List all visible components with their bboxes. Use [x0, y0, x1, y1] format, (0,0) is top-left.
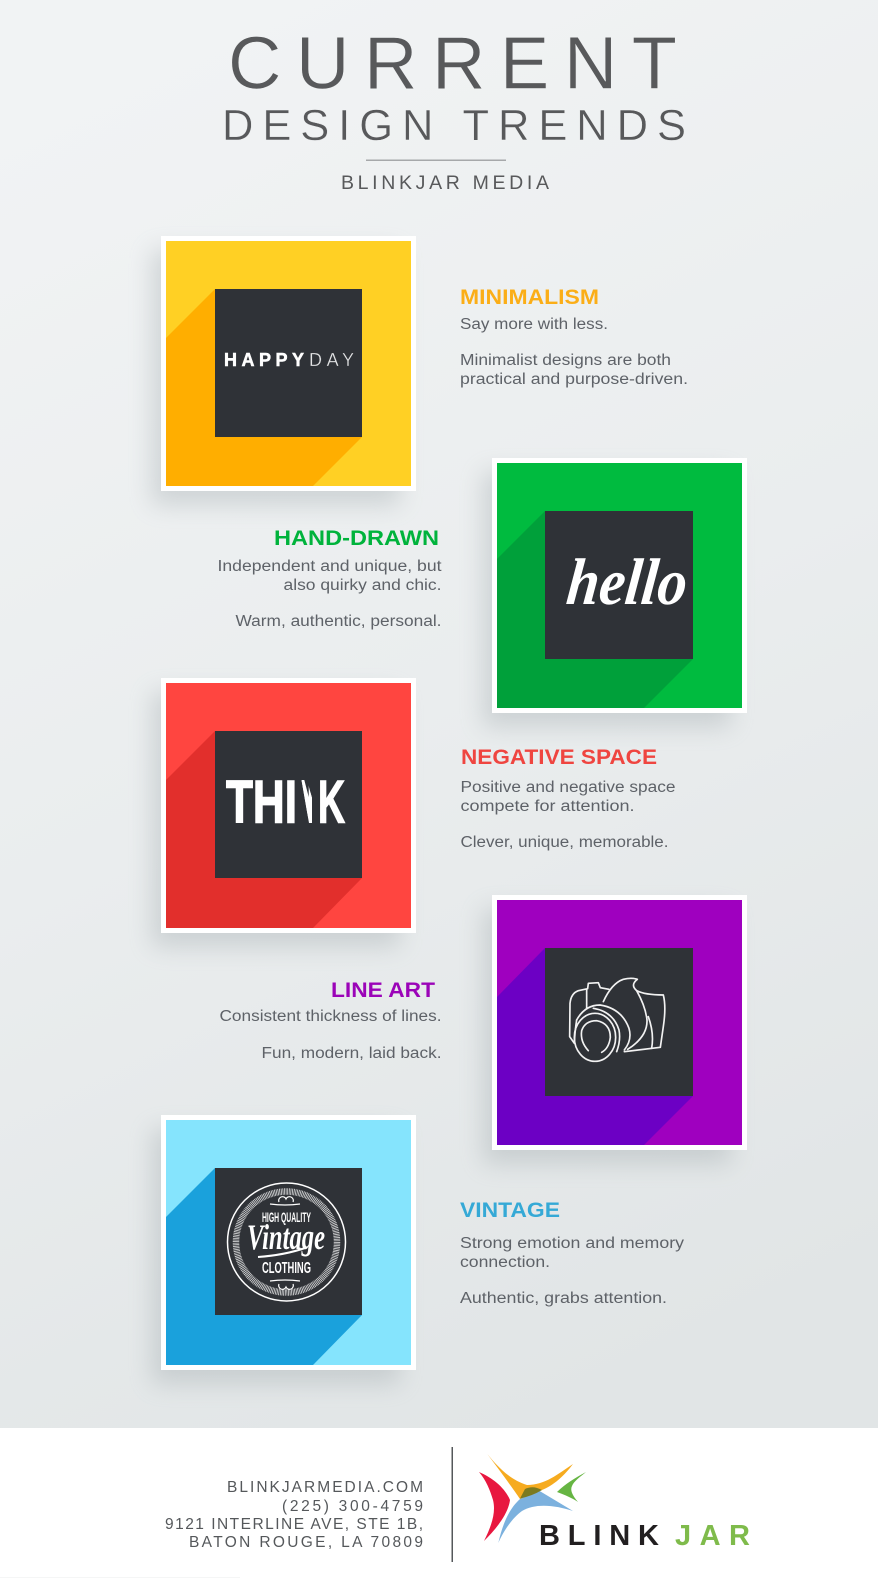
text: hand-drawn: [218, 527, 442, 630]
text: vintage: Strong emotion and memory: [460, 1235, 684, 1252]
logo: blinkjar: JAR: [675, 1520, 750, 1552]
icon: think wordmark: THI: [226, 768, 297, 835]
panel: vintage card: [152, 1115, 416, 1384]
icon: vintage badge: HIGH QUALITY: [262, 1209, 311, 1225]
text: minimalism: MINIMALISM: [460, 286, 599, 309]
text: hand-drawn: also quirky and chic.: [284, 577, 442, 594]
text: negative space: NEGATIVE SPACE: [461, 746, 657, 769]
contact details: BATON ROUGE, LA 70809: [189, 1534, 423, 1551]
text: minimalism: practical and purpose-driven.: [460, 371, 688, 388]
text: vintage: connection.: [460, 1254, 550, 1271]
icon: hello script: hello: [563, 546, 691, 619]
text: line art: [220, 979, 442, 1062]
text: minimalism: Say more with less.: [460, 316, 608, 333]
logo: blinkjar: [479, 1454, 750, 1552]
text: negative space: Clever, unique, memorable.: [460, 834, 668, 851]
icon: think wordmark: K: [318, 768, 345, 835]
icon: camera outline: [570, 978, 665, 1061]
contact details: [165, 1479, 423, 1551]
panel: footer: [0, 1428, 878, 1595]
text: vintage: [460, 1199, 684, 1307]
icon: vintage badge: [228, 1183, 346, 1301]
text: vintage: VINTAGE: [460, 1199, 560, 1222]
text: line art: Consistent thickness of lines.: [220, 1008, 442, 1025]
text: minimalism: Minimalist designs are both: [460, 352, 671, 369]
contact details: (225) 300-4759: [282, 1498, 423, 1515]
text: hand-drawn: Independent and unique, but: [218, 558, 442, 575]
text: hand-drawn: Warm, authentic, personal.: [236, 613, 442, 630]
contact details: BLINKJARMEDIA.COM: [227, 1479, 423, 1496]
icon: think wordmark: [226, 780, 346, 824]
title: current: CURRENT: [228, 22, 677, 104]
subtitle: BLINKJAR MEDIA: [341, 172, 549, 194]
contact details: 9121 INTERLINE AVE, STE 1B,: [165, 1516, 423, 1533]
icon: think wordmark: N: [296, 768, 316, 835]
text: line art: LINE ART: [331, 979, 435, 1002]
panel: line art card: [483, 895, 747, 1164]
title: design trends: DESIGN TRENDS: [222, 102, 686, 150]
text: negative space: compete for attention.: [460, 798, 634, 815]
title block: [222, 22, 686, 194]
icon: vintage badge: Vintage: [247, 1217, 325, 1257]
logo: blinkjar: BLINK: [539, 1520, 659, 1552]
text: line art: Fun, modern, laid back.: [262, 1045, 442, 1062]
text: negative space: Positive and negative space: [460, 779, 676, 796]
icon: vintage badge: CLOTHING: [262, 1260, 311, 1277]
panel: hand-drawn card: [483, 458, 747, 727]
text: vintage: Authentic, grabs attention.: [460, 1290, 667, 1307]
text: hand-drawn: HAND-DRAWN: [274, 527, 439, 550]
panel: negative space card: [152, 678, 416, 947]
icon: happyday wordmark: HAPPY: [224, 350, 304, 370]
text: negative space: [460, 746, 676, 851]
icon: happyday wordmark: [224, 350, 354, 370]
icon: happyday wordmark: DAY: [309, 350, 354, 370]
text: minimalism: [460, 286, 688, 388]
panel: minimalism card: [152, 236, 416, 505]
